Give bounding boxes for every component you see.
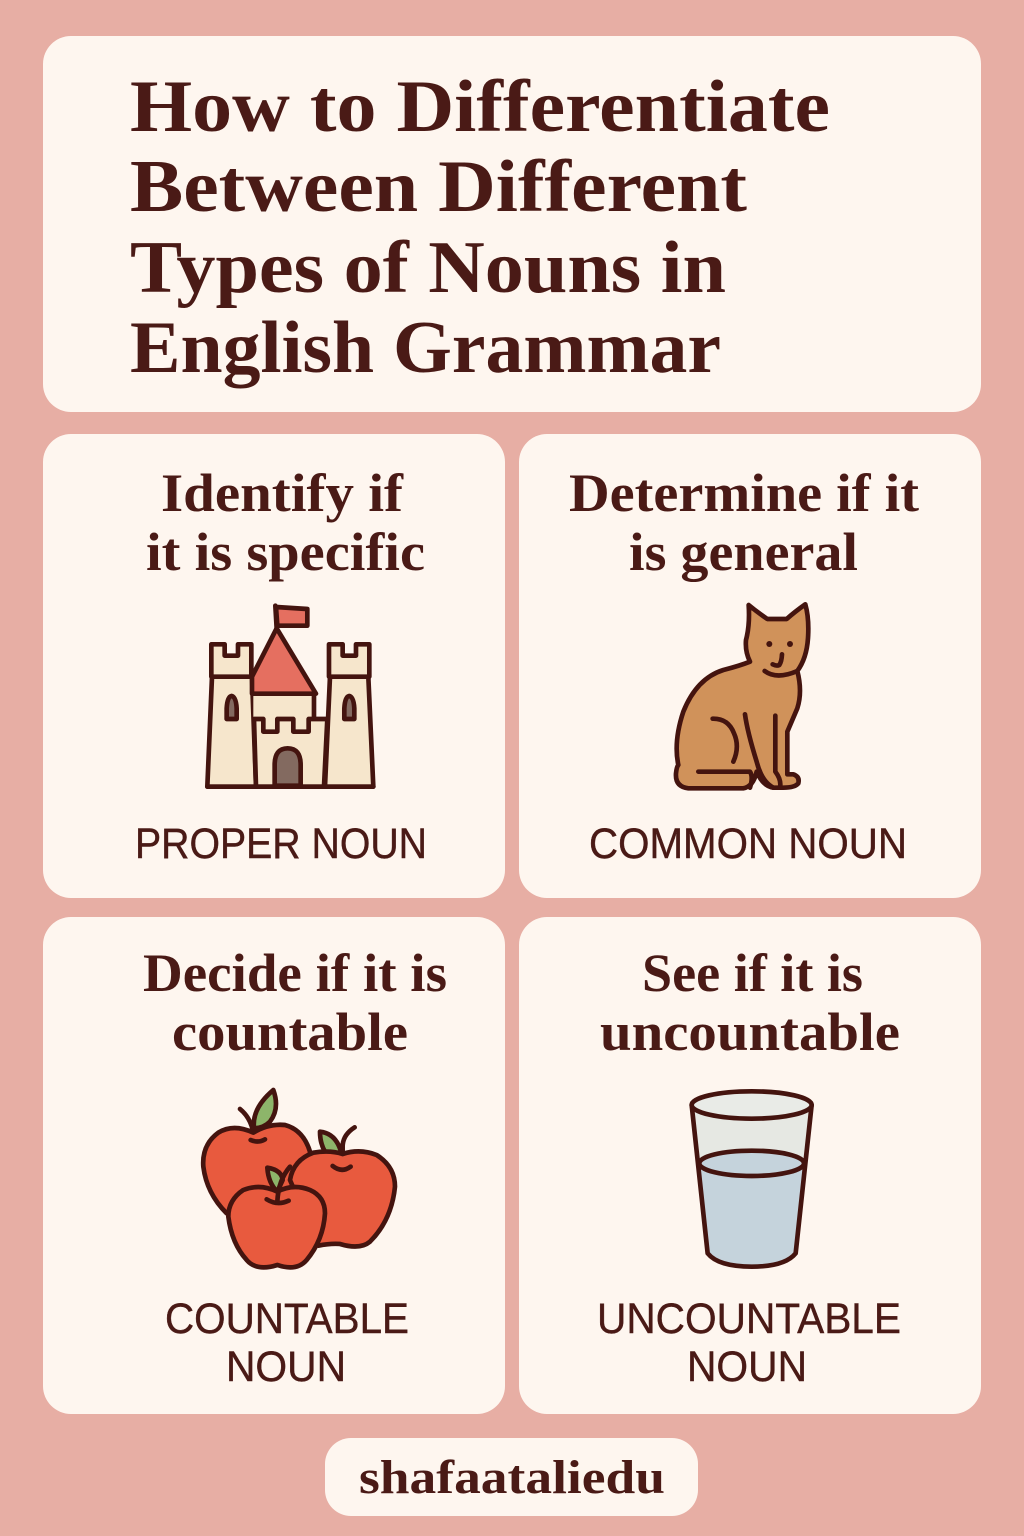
panel: countable noun (43, 917, 505, 1414)
heading: determine if it is general (569, 463, 919, 582)
heading: see if it is uncountable (600, 943, 900, 1062)
icon: castle (207, 606, 373, 787)
icon: apples (203, 1090, 395, 1267)
label: uncountable noun (597, 1295, 901, 1391)
heading: decide if it is countable (143, 943, 447, 1062)
footer badge: shafaataliedu (359, 1451, 665, 1504)
label: countable noun (165, 1295, 409, 1391)
heading: see if it is uncountable: See if it is (642, 943, 863, 1003)
label: countable noun: COUNTABLE (165, 1295, 409, 1343)
heading: determine if it is general: Determine if it (569, 463, 919, 523)
title heading: English Grammar (130, 307, 721, 389)
panel: title (43, 36, 981, 412)
heading: decide if it is countable: countable (172, 1002, 408, 1062)
title heading: How to Differentiate (130, 66, 830, 148)
label: uncountable noun: UNCOUNTABLE (597, 1295, 901, 1343)
title heading: Between Different (130, 146, 747, 228)
label: uncountable noun: NOUN (687, 1343, 807, 1391)
label: common noun: COMMON NOUN (589, 820, 907, 868)
icon: cat (676, 604, 808, 788)
panel: uncountable noun (519, 917, 981, 1414)
footer badge (325, 1438, 698, 1516)
heading: determine if it is general: is general (629, 522, 858, 582)
heading: see if it is uncountable: uncountable (600, 1002, 900, 1062)
heading: identify if it is specific: Identify if (161, 463, 404, 523)
heading: identify if it is specific: it is specific (146, 522, 425, 582)
title heading: Types of Nouns in (130, 227, 726, 309)
label: proper noun: PROPER NOUN (135, 820, 427, 868)
panel: common noun (519, 434, 981, 898)
title heading (130, 66, 830, 389)
heading: identify if it is specific (146, 463, 425, 582)
panel: proper noun (43, 434, 505, 898)
icon: glass of water (692, 1091, 812, 1267)
label: countable noun: NOUN (226, 1343, 346, 1391)
heading: decide if it is countable: Decide if it is (143, 943, 447, 1003)
